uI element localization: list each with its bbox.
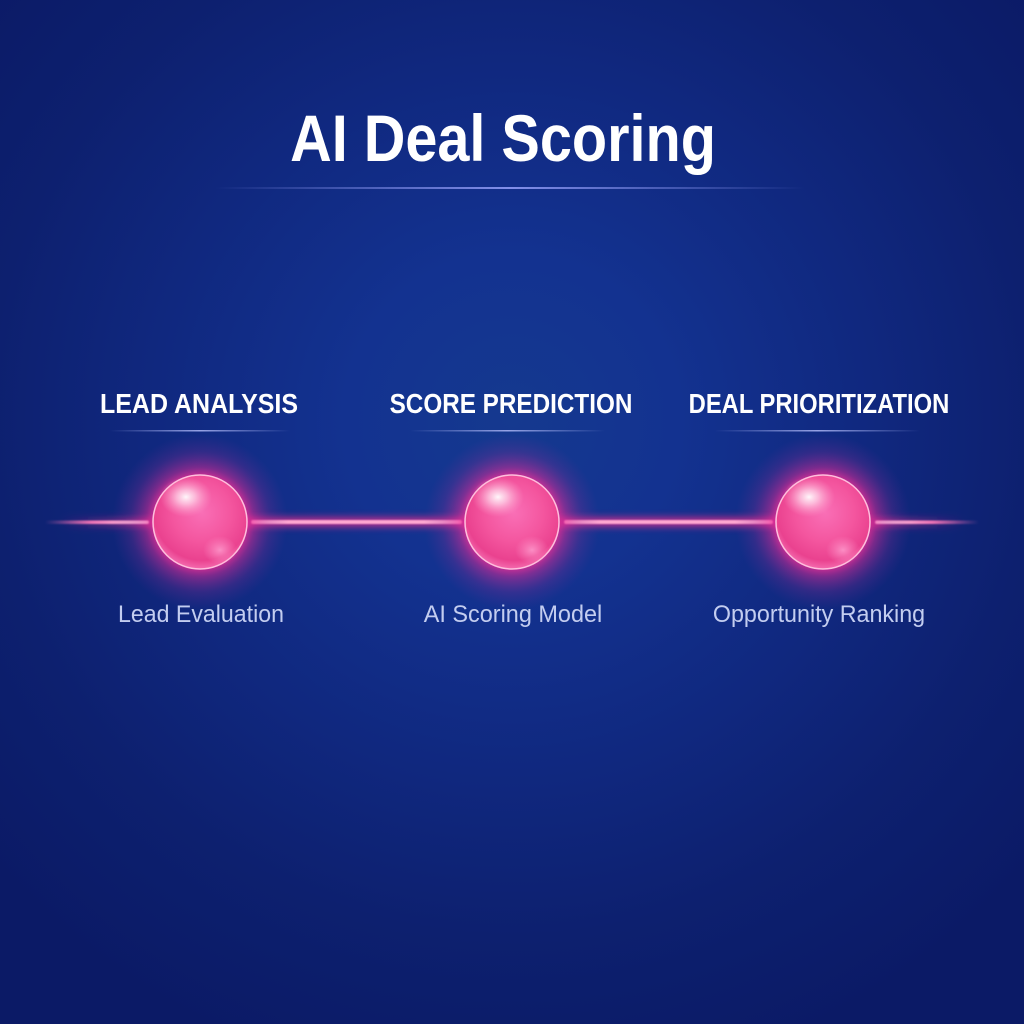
node 3 [735,434,911,610]
connector lines [45,518,979,526]
node 1 [112,434,288,610]
label: AI scoring model: AI Scoring Model [423,601,602,628]
step heading: deal prioritization: DEAL PRIORITIZATION [688,388,949,419]
step heading: score prediction: SCORE PREDICTION [389,388,632,419]
label: opportunity ranking: Opportunity Ranking [713,601,925,628]
title underline [215,187,805,189]
label: lead evaluation: Lead Evaluation [118,601,284,628]
node 2 [424,434,600,610]
title: AI Deal Scoring [290,101,716,175]
heading underlines [110,430,920,432]
step heading: lead analysis: LEAD ANALYSIS [100,388,297,419]
